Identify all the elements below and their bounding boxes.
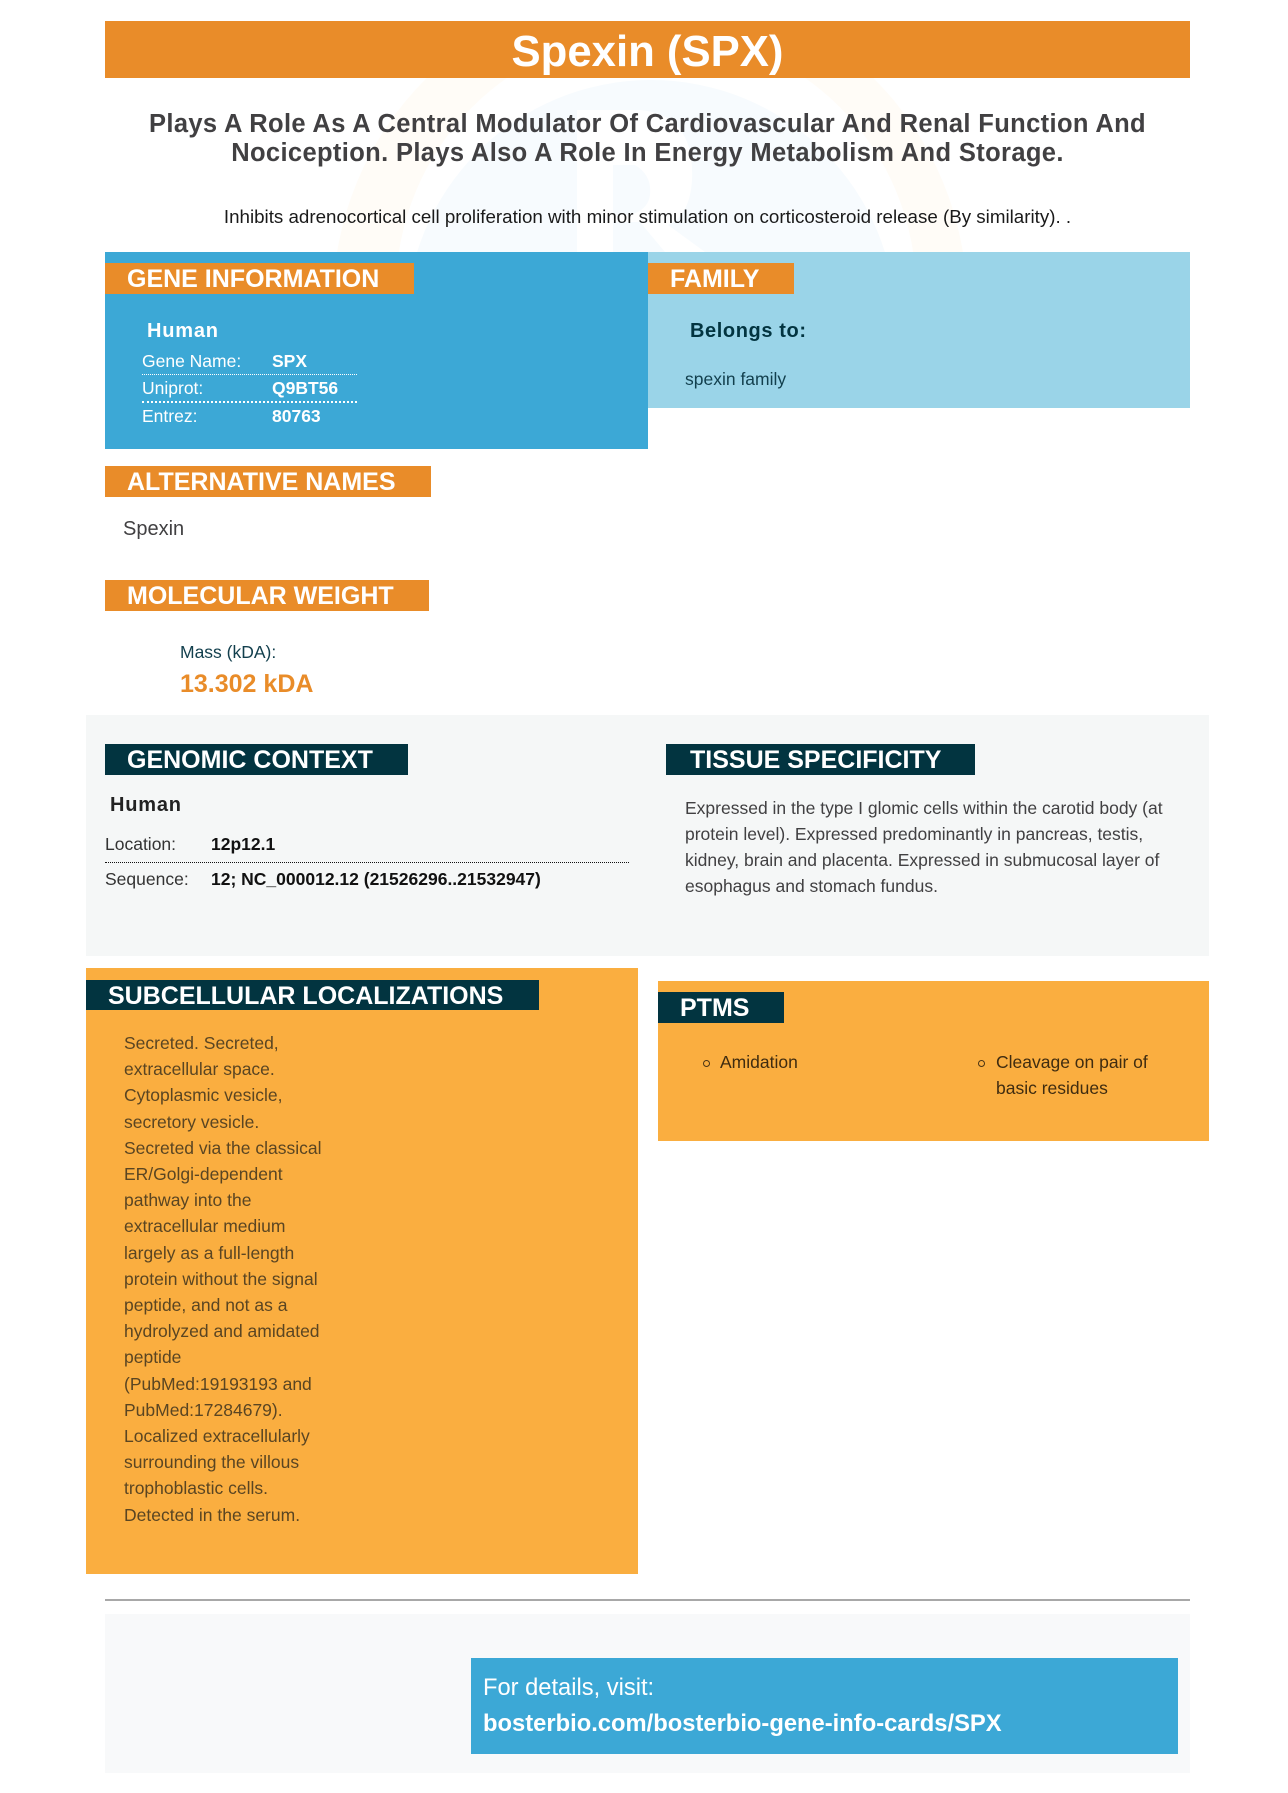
subcellular localization text: pathway into the (124, 1190, 251, 1210)
subcellular localization text: extracellular space. (124, 1059, 275, 1079)
subcellular localization text: Localized extracellularly (124, 1426, 310, 1446)
panel: gene information (105, 252, 648, 449)
mass label: Mass (kDA): (180, 642, 276, 662)
subcellular localization text: PubMed:17284679). (124, 1400, 283, 1420)
subcellular localization text (124, 1033, 321, 1525)
heading: ptms: PTMS (680, 994, 749, 1022)
heading: molecular weight: MOLECULAR WEIGHT (127, 582, 394, 610)
subtitle (149, 110, 1146, 167)
entrez row (142, 406, 321, 426)
details url: bosterbio.com/bosterbio-gene-info-cards/SPX (483, 1710, 1002, 1737)
subtitle: Nociception. Plays Also A Role In Energy Metabolism And Storage. (231, 139, 1064, 167)
panel: footer (105, 1614, 1190, 1773)
title banner (105, 21, 1190, 78)
ptm item: cleavage: Cleavage on pair of (996, 1052, 1148, 1072)
tissue specificity text: kidney, brain and placenta. Expressed in submucosal layer of (685, 850, 1159, 870)
uniprot row (142, 378, 338, 398)
subcellular localization text: surrounding the villous (124, 1452, 299, 1472)
family value: spexin family (685, 369, 786, 389)
heading: alternative names: ALTERNATIVE NAMES (127, 468, 396, 496)
subcellular localization text: peptide, and not as a (124, 1295, 287, 1315)
heading: family (648, 263, 794, 294)
subcellular localization text: (PubMed:19193193 and (124, 1374, 312, 1394)
entrez row: Entrez: (142, 406, 197, 426)
tissue specificity text: Expressed in the type I glomic cells within the carotid body (at (685, 798, 1163, 818)
subcellular localization text: peptide (124, 1347, 181, 1367)
heading: genomic context: GENOMIC CONTEXT (127, 746, 373, 774)
uniprot row: Uniprot: (142, 378, 203, 398)
subcellular localization text: Cytoplasmic vesicle, (124, 1085, 283, 1105)
location row: 12p12.1 (211, 834, 275, 854)
location row: Location: (105, 834, 176, 854)
subcellular localization text: secretory vesicle. (124, 1112, 259, 1132)
heading: tissue specificity: TISSUE SPECIFICITY (690, 746, 941, 774)
panel: subcellular localizations (86, 968, 638, 1574)
gene name row: Gene Name: (142, 351, 241, 371)
bullet: amidation (703, 1060, 710, 1067)
subcellular localization text: Secreted. Secreted, (124, 1033, 279, 1053)
tissue specificity text: esophagus and stomach fundus. (685, 876, 938, 896)
details label: For details, visit: (483, 1675, 654, 1701)
tissue specificity text: protein level). Expressed predominantly in pancreas, testis, (685, 824, 1143, 844)
organism label: Human (110, 794, 182, 816)
panel: genomic context and tissue specificity (86, 715, 1209, 956)
subcellular localization text: Detected in the serum. (124, 1505, 300, 1525)
mass value: 13.302 kDA (180, 670, 313, 698)
panel: ptms (658, 981, 1209, 1141)
ptm item: cleavage: basic residues (996, 1078, 1108, 1098)
subcellular localization text: hydrolyzed and amidated (124, 1321, 320, 1341)
subcellular localization text: protein without the signal (124, 1269, 318, 1289)
subcellular localization text: largely as a full-length (124, 1243, 294, 1263)
description: Inhibits adrenocortical cell proliferation with minor stimulation on corticosteroid release (By similarity). . (224, 206, 1071, 227)
panel: family (648, 252, 1190, 408)
ptm item: amidation: Amidation (720, 1052, 798, 1072)
ptm item: cleavage (996, 1052, 1148, 1098)
heading: subcellular localizations: SUBCELLULAR LOCALIZATIONS (108, 982, 503, 1010)
belongs to label: Belongs to: (690, 320, 807, 342)
subcellular localization text: extracellular medium (124, 1216, 285, 1236)
organism label: Human (147, 320, 219, 342)
sequence row: 12; NC_000012.12 (21526296..21532947) (211, 869, 541, 889)
entrez row: 80763 (272, 406, 321, 426)
uniprot row: Q9BT56 (272, 378, 338, 398)
sequence row: Sequence: (105, 869, 189, 889)
bullet: cleavage (978, 1060, 985, 1067)
heading: family: FAMILY (670, 265, 759, 293)
gene name row: SPX (272, 351, 307, 371)
location row (105, 834, 275, 854)
watermark logo (300, 78, 1020, 252)
subcellular localization text: Secreted via the classical (124, 1138, 321, 1158)
subcellular localization text: trophoblastic cells. (124, 1478, 268, 1498)
heading: gene information: GENE INFORMATION (127, 265, 379, 293)
tissue specificity text (685, 798, 1163, 896)
title banner: Spexin (SPX) (512, 27, 783, 76)
subcellular localization text: ER/Golgi-dependent (124, 1164, 283, 1184)
alternative name value: Spexin (123, 518, 184, 540)
callout: details link (471, 1658, 1178, 1754)
subtitle: Plays A Role As A Central Modulator Of Cardiovascular And Renal Function And (149, 110, 1146, 138)
gene name row (142, 351, 307, 371)
heading: ptms (658, 992, 784, 1023)
